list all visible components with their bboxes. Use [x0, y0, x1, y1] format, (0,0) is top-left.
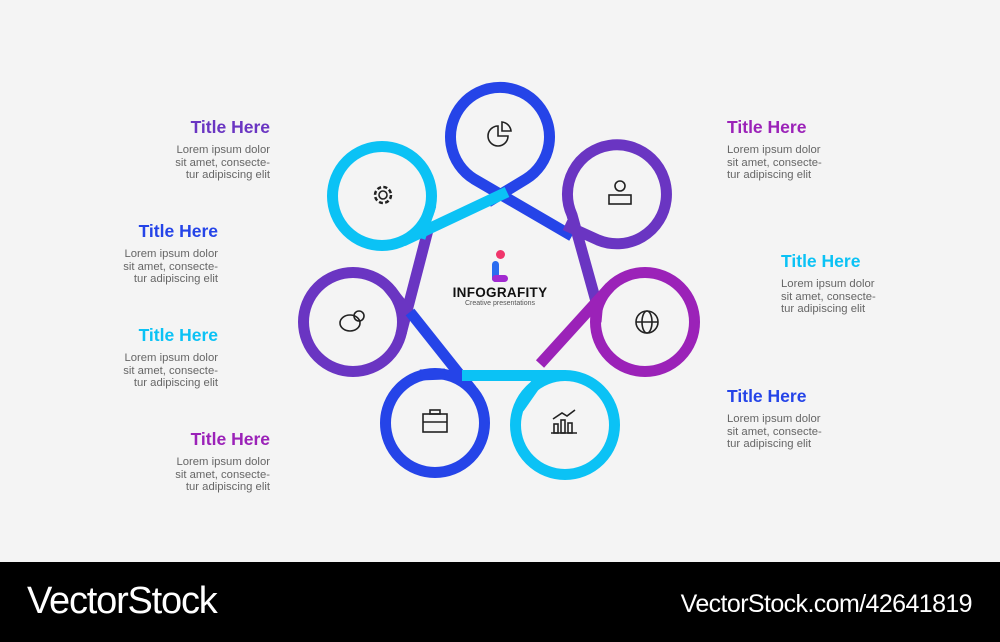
text: top-left: tur adipiscing elit [186, 169, 270, 181]
text: left 3 [123, 325, 218, 389]
text: right 1: tur adipiscing elit [727, 169, 811, 181]
text: left 4: sit amet, consecte- [175, 468, 270, 480]
text: right 1: sit amet, consecte- [727, 156, 822, 168]
text: right 3: sit amet, consecte- [727, 426, 822, 438]
loop: magenta right [540, 272, 694, 372]
text: left 4: Title Here [191, 429, 270, 449]
icon: gear [375, 187, 391, 203]
icon: piggy [340, 311, 364, 331]
icon: pie [488, 122, 511, 146]
icons [340, 122, 658, 433]
text: left 4: tur adipiscing elit [186, 481, 270, 493]
text: left 3: Lorem ipsum dolor [124, 352, 218, 364]
center logo: INFOGRAFITY [453, 285, 547, 300]
text: right 3: Lorem ipsum dolor [727, 413, 821, 425]
footer bar: VectorStock.com/42641819 [681, 590, 972, 618]
center logo [453, 250, 547, 307]
text: right 2: Lorem ipsum dolor [781, 278, 875, 290]
text: top-left: Title Here [191, 117, 270, 137]
text: right 1: Lorem ipsum dolor [727, 144, 821, 156]
text: left 3: tur adipiscing elit [134, 377, 218, 389]
text: right 1: Title Here [727, 117, 806, 137]
text: left 3: Title Here [139, 325, 218, 345]
text: right 3: Title Here [727, 386, 806, 406]
text: right 3 [727, 386, 822, 450]
icon: briefcase [423, 410, 447, 432]
text: right 2: tur adipiscing elit [781, 303, 865, 315]
text: right 2 [781, 251, 876, 315]
text: left 4 [175, 429, 270, 493]
icon: globe [636, 311, 658, 333]
loop: blue bottom-left [386, 312, 484, 472]
icon: chart [551, 410, 577, 433]
text: top-left: sit amet, consecte- [175, 156, 270, 168]
text: right 1 [727, 117, 822, 181]
loop: cyan top-left [332, 146, 507, 246]
text: top-left [175, 117, 270, 181]
text: left 4: Lorem ipsum dolor [176, 456, 270, 468]
loop: purple left [304, 230, 428, 372]
icon: user [609, 181, 631, 204]
text: right 3: tur adipiscing elit [727, 438, 811, 450]
loop: cyan bottom-right [462, 376, 614, 474]
footer bar: VectorStock [27, 580, 217, 622]
text: right 2: Title Here [781, 251, 860, 271]
text: left 2 [123, 221, 218, 285]
text: left 2: sit amet, consecte- [123, 260, 218, 272]
text: left 2: tur adipiscing elit [134, 273, 218, 285]
text: left 2: Title Here [139, 221, 218, 241]
text: right 2: sit amet, consecte- [781, 290, 876, 302]
text: top-left: Lorem ipsum dolor [176, 144, 270, 156]
footer bar [0, 562, 1000, 642]
loop: blue top [450, 87, 572, 236]
loop: purple top-right [565, 145, 666, 305]
text: left 2: Lorem ipsum dolor [124, 248, 218, 260]
center logo: Creative presentations [465, 300, 535, 307]
text: left 3: sit amet, consecte- [123, 364, 218, 376]
